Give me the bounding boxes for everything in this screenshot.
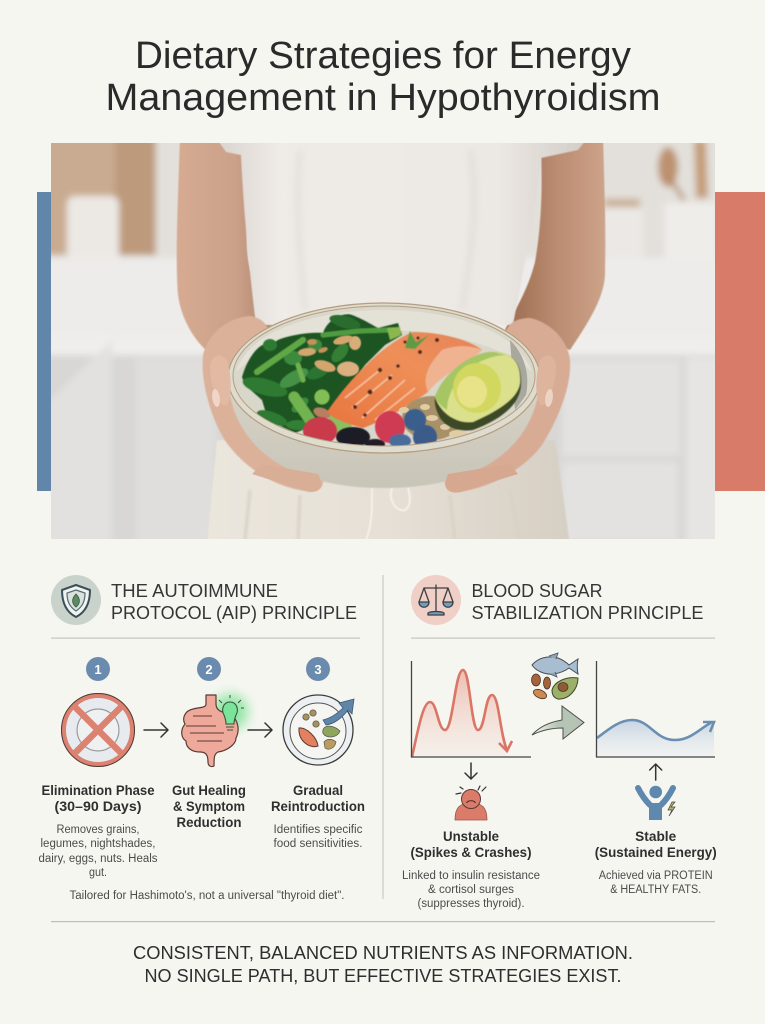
icon: plate with reintroduced foods (283, 695, 354, 765)
step 3 label: Gradual (293, 783, 343, 798)
arms (177, 135, 275, 350)
step number 3: 3 (314, 662, 322, 677)
arrow: down to unstable (465, 763, 477, 779)
icon: balance scale (411, 575, 461, 625)
greens (241, 312, 402, 435)
footer message: NO SINGLE PATH, BUT EFFECTIVE STRATEGIES EXIST. (144, 966, 622, 986)
right hand (445, 318, 570, 492)
title: Management in Hypothyroidism (106, 77, 660, 119)
heading: AIP: THE AUTOIMMUNE (111, 580, 278, 601)
chart: unstable blood sugar (412, 661, 531, 757)
unstable description: & cortisol surges (428, 884, 514, 896)
AIP note: Tailored for Hashimoto's, not a universal "thyroid diet". (70, 890, 344, 902)
step 1 description: gut. (89, 867, 107, 879)
almonds (298, 334, 361, 421)
food in the bowl (241, 312, 521, 449)
salmon fillet (327, 331, 482, 428)
unstable description: (suppresses thyroid). (418, 898, 524, 910)
icon: gut with light bulb (182, 694, 248, 767)
bowl inner rim line (233, 306, 535, 446)
heading: blood sugar: STABILIZATION PRINCIPLE (472, 602, 704, 623)
icon: shield with leaf (51, 575, 101, 625)
icon: fish, nuts and avocado (532, 653, 578, 701)
icon: tired person (455, 786, 487, 820)
arrow (248, 723, 272, 737)
title: Dietary Strategies for Energy (135, 35, 631, 77)
panel: blood sugar stabilization principle (402, 575, 717, 910)
step number 1 (86, 657, 110, 681)
step 1 description: legumes, nightshades, (40, 838, 156, 850)
icon: crossed-out plate (62, 694, 134, 766)
panel: autoimmune protocol principle (38, 575, 365, 902)
kitchen background (51, 143, 715, 539)
stable label: Stable (635, 829, 677, 844)
step 1 label (42, 783, 155, 814)
unstable label: (Spikes & Crashes) (410, 845, 532, 860)
heading: AIP (111, 580, 357, 623)
step number 2: 2 (205, 662, 213, 677)
step 3 label (271, 783, 365, 814)
step 3 description (274, 824, 363, 850)
step 1 description: Removes grains, (56, 824, 140, 836)
step 1 label: (30–90 Days) (54, 799, 142, 814)
step 1 description (38, 824, 158, 879)
fingers under bowl (252, 468, 321, 492)
grains (402, 396, 462, 440)
stable description: Achieved via PROTEIN (599, 870, 713, 882)
accent bar: blue (37, 192, 51, 491)
step 2 label: & Symptom (173, 799, 245, 814)
step 2 label (172, 783, 246, 830)
section divider: vertical (382, 575, 384, 899)
berries (303, 409, 437, 449)
arrow: transition to stable (532, 706, 584, 739)
stable label (595, 829, 717, 860)
unstable label: Unstable (443, 829, 499, 844)
unstable description (402, 870, 540, 910)
heading: blood sugar (472, 580, 704, 623)
step 3 label: Reintroduction (271, 799, 365, 814)
fingers over bowl (210, 355, 231, 405)
step 2 label: Reduction (176, 815, 242, 830)
stable label: (Sustained Energy) (595, 845, 717, 860)
heading: AIP: PROTOCOL (AIP) PRINCIPLE (111, 602, 357, 623)
step 1 description: dairy, eggs, nuts. Heals (38, 853, 158, 865)
stable description: & HEALTHY FATS. (610, 884, 701, 896)
bowl (230, 392, 538, 488)
avocado (435, 352, 521, 430)
step number 2 (197, 657, 221, 681)
arrow: up from stable (650, 764, 662, 780)
footer message (133, 943, 633, 986)
accent bar: coral (715, 192, 765, 491)
shirt (214, 135, 590, 325)
step 2 label: Gut Healing (172, 783, 246, 798)
step 3 description: Identifies specific (274, 824, 363, 836)
unstable label (410, 829, 532, 860)
heading: blood sugar: BLOOD SUGAR (472, 580, 602, 601)
step 3 description: food sensitivities. (274, 838, 362, 850)
step 1 label: Elimination Phase (42, 783, 155, 798)
arrow (144, 723, 168, 737)
hero photo: woman holding a healthy bowl (51, 143, 715, 539)
step number 3 (306, 657, 330, 681)
step number 1: 1 (94, 662, 102, 677)
chart: stable blood sugar (596, 661, 715, 757)
unstable description: Linked to insulin resistance (402, 870, 540, 882)
skirt (207, 440, 570, 545)
left hand (203, 316, 323, 492)
title (106, 35, 660, 119)
stable description (599, 870, 713, 896)
footer message: CONSISTENT, BALANCED NUTRIENTS AS INFORMATION. (133, 943, 633, 963)
icon: energized person (638, 786, 675, 820)
